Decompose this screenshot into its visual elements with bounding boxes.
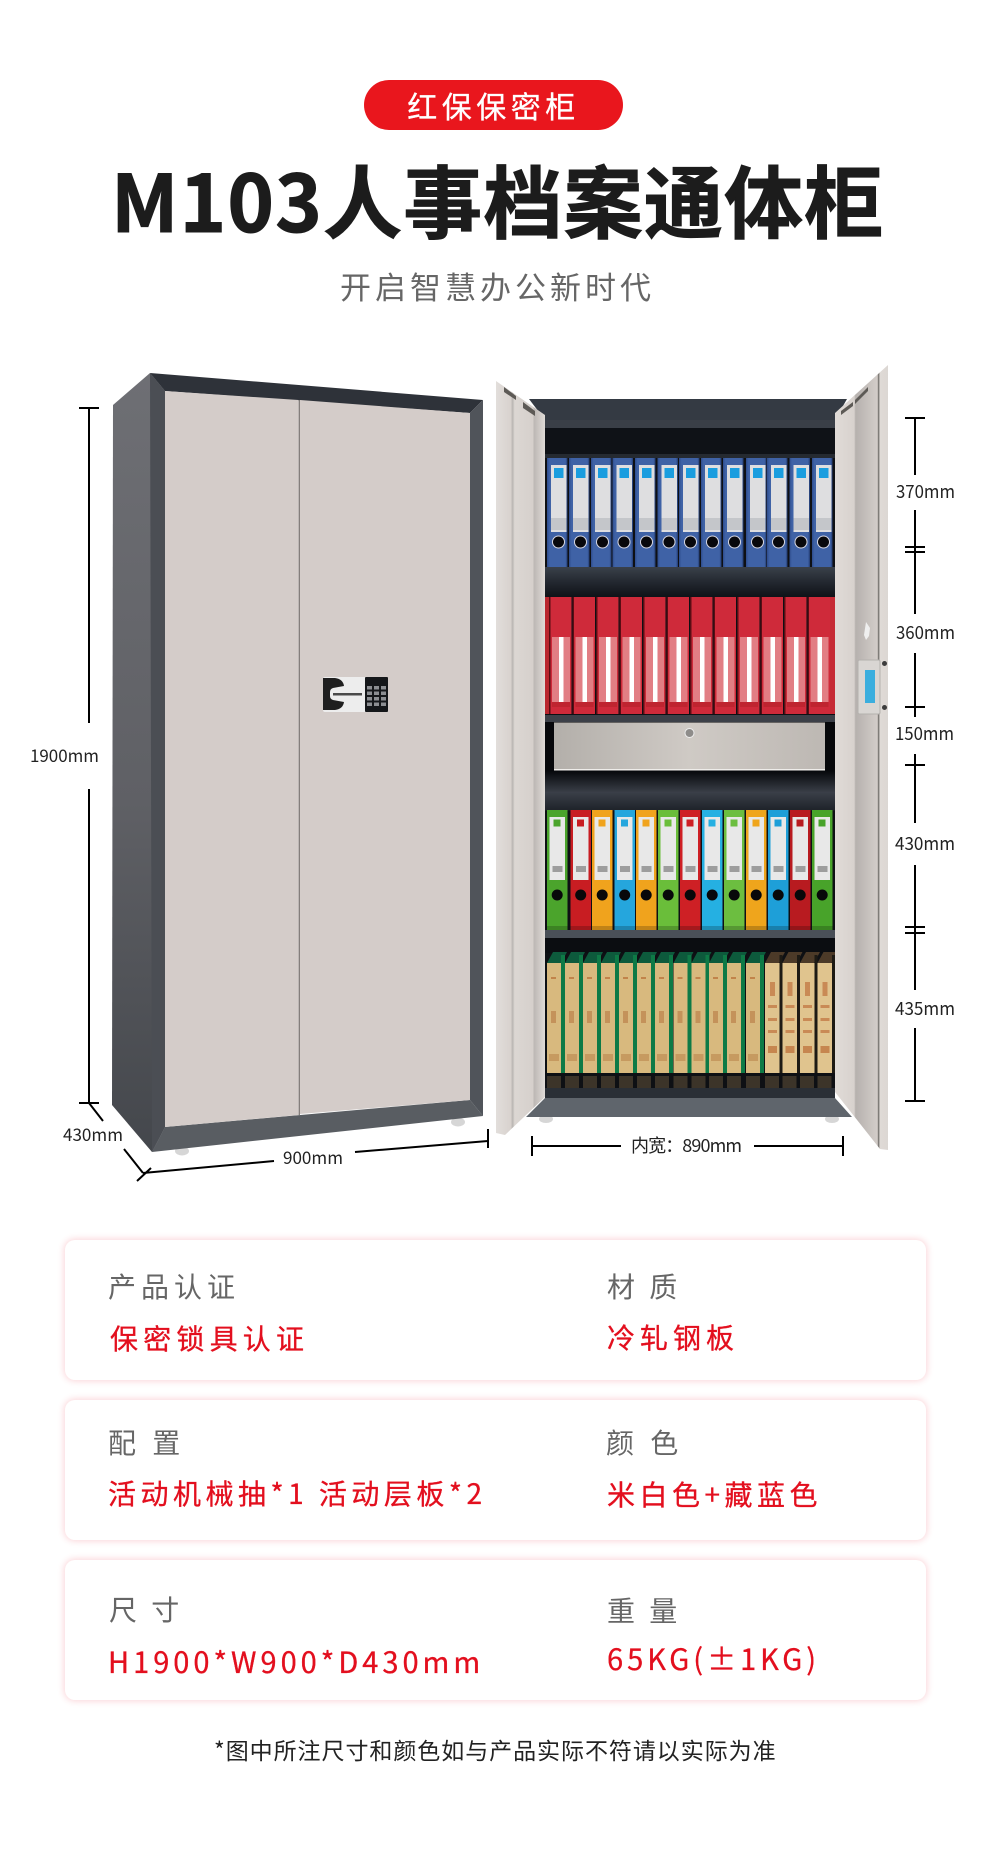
label 颜色: 颜 色 [606, 1422, 683, 1462]
cabinet top [529, 399, 847, 420]
cabinet bottom frame [152, 1100, 483, 1152]
header badge: 红保保密柜 [407, 83, 580, 127]
drawer [545, 722, 835, 772]
right dimension lines [905, 418, 925, 1101]
value 重量: 65KG(±1KG) [607, 1637, 820, 1679]
door split [298, 400, 300, 1115]
archive boxes [547, 952, 838, 1088]
label 430mm: 430mm [63, 1121, 123, 1146]
open cabinet interior [496, 365, 888, 1150]
value 颜色: 米白色+藏蓝色 [607, 1474, 822, 1514]
left open door [496, 381, 545, 1135]
back wall band [545, 770, 835, 810]
label 重量: 重 量 [607, 1590, 681, 1630]
feet [539, 1115, 839, 1123]
width dimension [143, 1129, 488, 1173]
label 430mm: 430mm [895, 830, 955, 856]
value 配置: 活动机械抽*1 活动层板*2 [108, 1473, 487, 1513]
blue binders [547, 458, 832, 567]
label 产品认证: 产品认证 [108, 1266, 240, 1306]
cabinet top frame [150, 373, 483, 413]
label 尺寸: 尺 寸 [109, 1589, 183, 1629]
value 保密锁具认证: 保密锁具认证 [110, 1318, 309, 1358]
product illustration and dimensions [30, 365, 955, 1182]
label 900mm: 900mm [283, 1144, 343, 1169]
panel: configuration and color [65, 1400, 926, 1540]
label 370mm: 370mm [896, 478, 955, 504]
right door [300, 400, 470, 1114]
label 360mm: 360mm [896, 619, 955, 645]
cabinet floor [526, 1088, 852, 1117]
shelf 1 [545, 567, 835, 597]
feet [175, 1118, 465, 1156]
footnote: *图中所注尺寸和颜色如与产品实际不符请以实际为准 [214, 1732, 777, 1766]
inner width dimension [532, 1136, 843, 1156]
value 冷轧钢板: 冷轧钢板 [607, 1317, 739, 1357]
cabinet left frame [150, 373, 165, 1152]
closed cabinet [112, 373, 483, 1156]
panel: size and weight [65, 1560, 926, 1700]
panel: certification and material [65, 1240, 926, 1380]
label 材质: 材 质 [607, 1266, 681, 1306]
shelf 3 [545, 930, 835, 953]
electronic lock [323, 677, 388, 712]
subtitle: 开启智慧办公新时代 [340, 263, 655, 308]
title: M103人事档案通体柜 [111, 140, 884, 255]
depth dimension [89, 1103, 151, 1181]
left dimension 1900mm [79, 408, 99, 1103]
shelf 2 [545, 715, 835, 722]
interior back wall [545, 415, 835, 1098]
red binders [545, 597, 835, 714]
label 435mm: 435mm [895, 995, 955, 1021]
left door [165, 391, 298, 1127]
value 尺寸: H1900*W900*D430mm [108, 1640, 484, 1682]
door keypad lock [858, 622, 887, 714]
label 150mm: 150mm [895, 720, 954, 746]
label 配置: 配 置 [108, 1422, 185, 1462]
cabinet side panel [112, 373, 165, 1152]
label inner width: 内宽：890mm [631, 1132, 742, 1158]
right open door [835, 365, 888, 1150]
colored binders [547, 810, 832, 930]
header badge [364, 80, 623, 130]
label 1900mm: 1900mm [30, 742, 99, 767]
cabinet right frame [470, 400, 483, 1116]
